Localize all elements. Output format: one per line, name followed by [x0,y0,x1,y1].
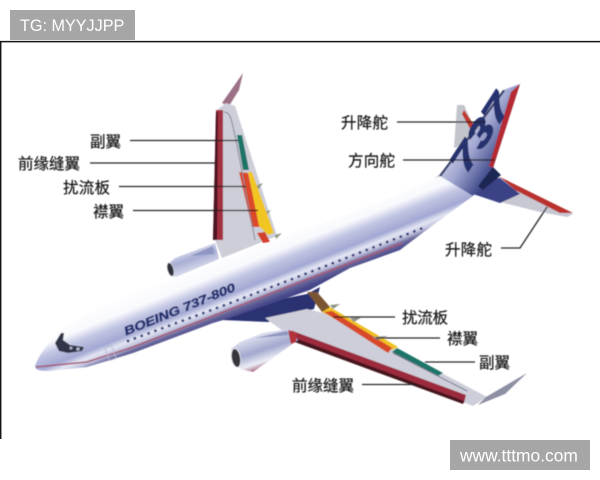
bottom watermark tag: www.tttmo.com [459,446,578,466]
line: flap lower [376,337,440,339]
fuselage [35,176,473,371]
label: aileron upper: 副翼 [90,133,121,151]
near winglet [478,373,527,405]
labels [18,114,510,395]
far wing flap [248,172,274,235]
passenger windows [128,228,423,341]
far wing flap fairings [255,183,282,239]
far wing aileron [237,135,249,170]
line: slat lower [362,384,417,386]
fin rudder edge [489,84,520,168]
label: elevator: 升降舵 [341,114,388,132]
cheat line [36,243,402,367]
far engine [166,243,219,277]
fin lettering: 737 [443,85,520,179]
top watermark tag [10,10,135,40]
label: flap lower: 襟翼 [447,330,478,348]
near wing flap fairings [330,304,388,340]
fuselage lettering: BOEING 737-800 [122,280,238,338]
near wing inboard panel [307,292,330,312]
near wing flap [316,300,398,350]
far wing spoiler [239,172,260,227]
label: slat upper: 前缘缝翼 [18,155,80,173]
line: slat upper [90,162,216,164]
far wing [213,73,282,258]
label: aileron lower: 副翼 [479,354,510,372]
leader lines [90,122,547,384]
label: spoiler lower: 扰流板 [402,309,448,327]
near engine [230,329,298,372]
airplane illustration [18,73,573,406]
label: flap upper: 襟翼 [93,203,124,221]
far winglet [222,73,243,106]
line: aileron upper [130,140,238,142]
near wing aileron [392,348,443,376]
fin fillet [392,170,470,204]
cockpit windshield [55,333,84,353]
label: spoiler upper: 扰流板 [63,179,110,197]
line: elevator lower [501,207,547,248]
label: rudder: 方向舵 [348,152,395,170]
bottom watermark tag [450,440,590,470]
line: rudder [403,159,495,161]
near wing [265,292,527,406]
far stabilizer [454,105,476,148]
line: elevator [397,121,485,123]
near stabilizer [470,177,573,217]
fuselage door [105,345,116,361]
line: spoiler upper [119,186,246,188]
top watermark tag: TG: MYYJJPP [20,17,124,35]
tail fin [392,84,520,204]
label: elevator lower: 升降舵 [445,241,492,259]
label: slat lower: 前缘缝翼 [292,377,354,395]
line: aileron lower [425,361,475,363]
line: spoiler lower [333,316,395,318]
near wing leading edge slat [290,330,466,403]
line: flap upper [133,210,258,212]
near wing spoiler [324,311,392,353]
near wing root shadow [222,287,320,322]
far wing leading edge slat [213,110,223,240]
